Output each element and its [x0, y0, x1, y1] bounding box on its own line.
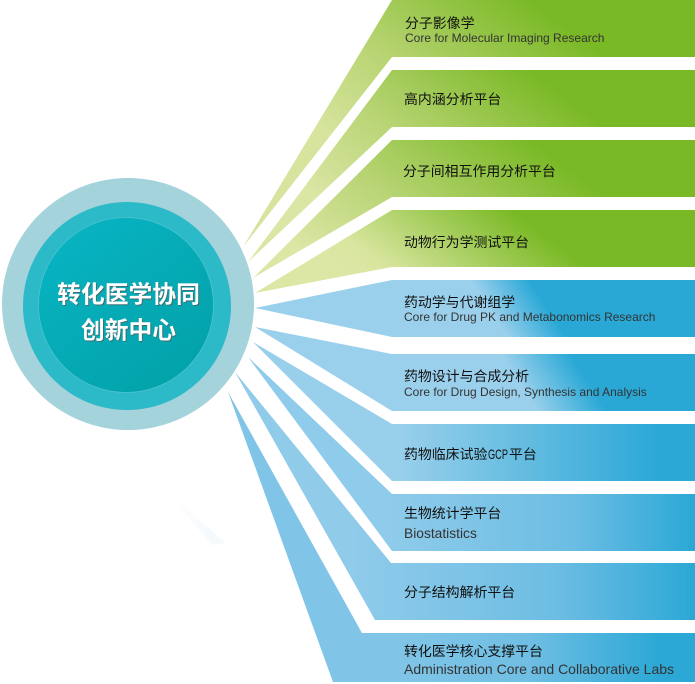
- panel: blue core bars: [228, 280, 695, 682]
- bar: animal behaviour: [255, 210, 695, 293]
- label: biostatistics: Biostatistics: [404, 526, 477, 541]
- label: biostatistics: [404, 505, 501, 541]
- label: drug design: Core for Drug Design, Synthesis and Analysis: [404, 385, 647, 399]
- panel: green core bars: [243, 0, 695, 293]
- label: GCP: GCP: [488, 446, 508, 462]
- bar: administration core: [228, 392, 695, 682]
- inner disc: [38, 218, 214, 392]
- title: 创新中心: [81, 318, 176, 344]
- bar: biostatistics: [248, 357, 695, 551]
- bar: molecular structure: [235, 372, 695, 620]
- bar: high content analysis: [248, 70, 695, 262]
- label: GCP: 药物临床试验: [404, 446, 487, 462]
- label: GCP: [404, 446, 537, 462]
- label: GCP: 平台: [509, 446, 537, 462]
- outer ring: [2, 178, 254, 430]
- label: molecular structure: 分子结构解析平台: [404, 584, 515, 600]
- bar: drug design: [255, 327, 695, 411]
- title: 转化医学协同: [57, 282, 200, 308]
- label: molecular imaging: 分子影像学: [405, 15, 475, 31]
- label: drug PK: Core for Drug PK and Metabonomics Research: [404, 310, 655, 324]
- label: high content analysis: 高内涵分析平台: [404, 91, 501, 107]
- title: 转化医学协同: [58, 282, 201, 310]
- label: administration core: Administration Core and Collaborative Labs: [404, 661, 674, 677]
- label: molecular imaging: [405, 15, 604, 45]
- bar: molecular imaging: [243, 0, 695, 247]
- bar: drug PK: [255, 280, 695, 337]
- title: 创新中心: [82, 318, 177, 346]
- bar: GCP: [253, 342, 695, 481]
- bar: molecular interaction: [253, 140, 695, 278]
- label: biostatistics: 生物统计学平台: [404, 505, 501, 521]
- label: administration core: [404, 643, 674, 677]
- label: drug PK: 药动学与代谢组学: [404, 294, 515, 310]
- faint streak: [165, 490, 226, 545]
- central circle: [2, 178, 254, 430]
- middle ring: [23, 202, 231, 410]
- label: molecular interaction: 分子间相互作用分析平台: [403, 163, 556, 179]
- label: drug design: 药物设计与合成分析: [404, 368, 529, 384]
- label: molecular imaging: Core for Molecular Imaging Research: [405, 31, 604, 45]
- title: [57, 282, 201, 346]
- label: animal behaviour: 动物行为学测试平台: [404, 234, 529, 250]
- label: drug PK: [404, 294, 655, 324]
- label: drug design: [404, 368, 647, 399]
- label: administration core: 转化医学核心支撑平台: [404, 643, 543, 659]
